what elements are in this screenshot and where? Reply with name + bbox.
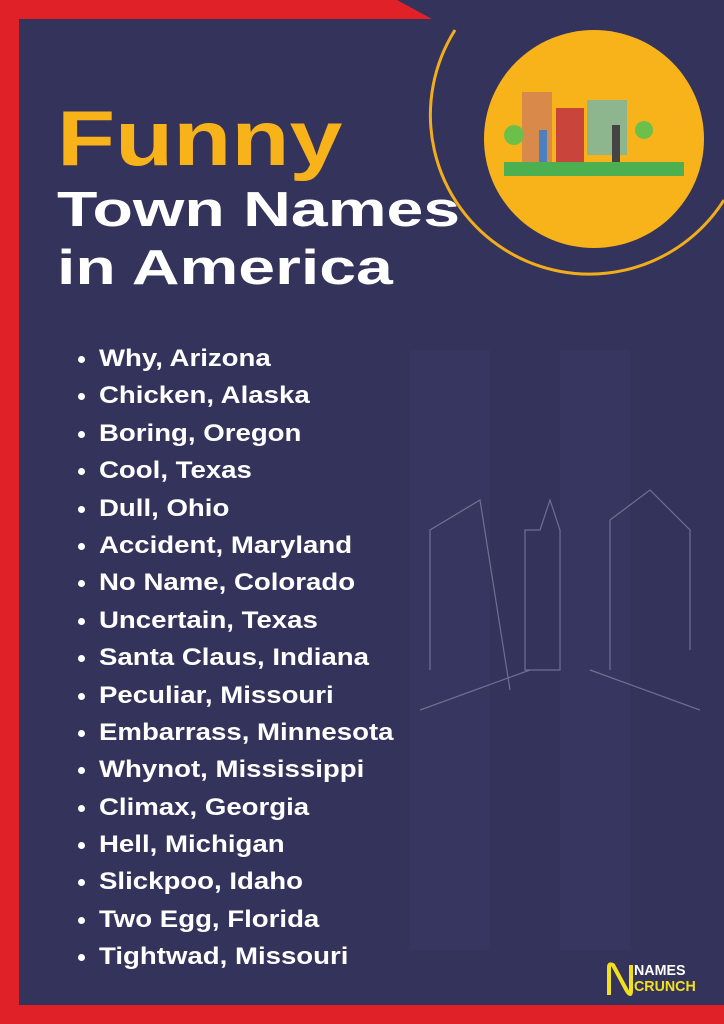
logo: NAMES xyxy=(634,962,685,979)
list of town names: Cool, Texas xyxy=(99,457,252,484)
list of town names: Climax, Georgia xyxy=(99,794,309,821)
list of town names: Tightwad, Missouri xyxy=(99,943,348,970)
decorative ring arc xyxy=(428,29,724,276)
list of town names: Embarrass, Minnesota xyxy=(99,719,394,746)
list of town names: No Name, Colorado xyxy=(99,569,355,596)
list of town names: Peculiar, Missouri xyxy=(99,682,334,709)
title: in America xyxy=(57,241,393,295)
list of town names: Santa Claus, Indiana xyxy=(99,644,369,671)
list of town names: Two Egg, Florida xyxy=(99,906,319,933)
list of town names: Chicken, Alaska xyxy=(99,382,310,409)
list of town names: Dull, Ohio xyxy=(99,495,229,522)
list of town names: Boring, Oregon xyxy=(99,420,301,447)
logo: CRUNCH xyxy=(634,978,696,995)
street sketch illustration xyxy=(420,489,700,710)
list of town names: Uncertain, Texas xyxy=(99,607,318,634)
list of town names: Whynot, Mississippi xyxy=(99,756,364,783)
logo xyxy=(607,962,696,996)
list of town names: Hell, Michigan xyxy=(99,831,285,858)
list of town names xyxy=(78,345,394,970)
icon: town illustration circle xyxy=(484,30,704,248)
title xyxy=(57,94,460,295)
list of town names: Why, Arizona xyxy=(99,345,271,372)
title: Funny xyxy=(57,94,342,182)
list of town names: Accident, Maryland xyxy=(99,532,352,559)
title: Town Names xyxy=(57,183,460,237)
list of town names: Slickpoo, Idaho xyxy=(99,868,303,895)
